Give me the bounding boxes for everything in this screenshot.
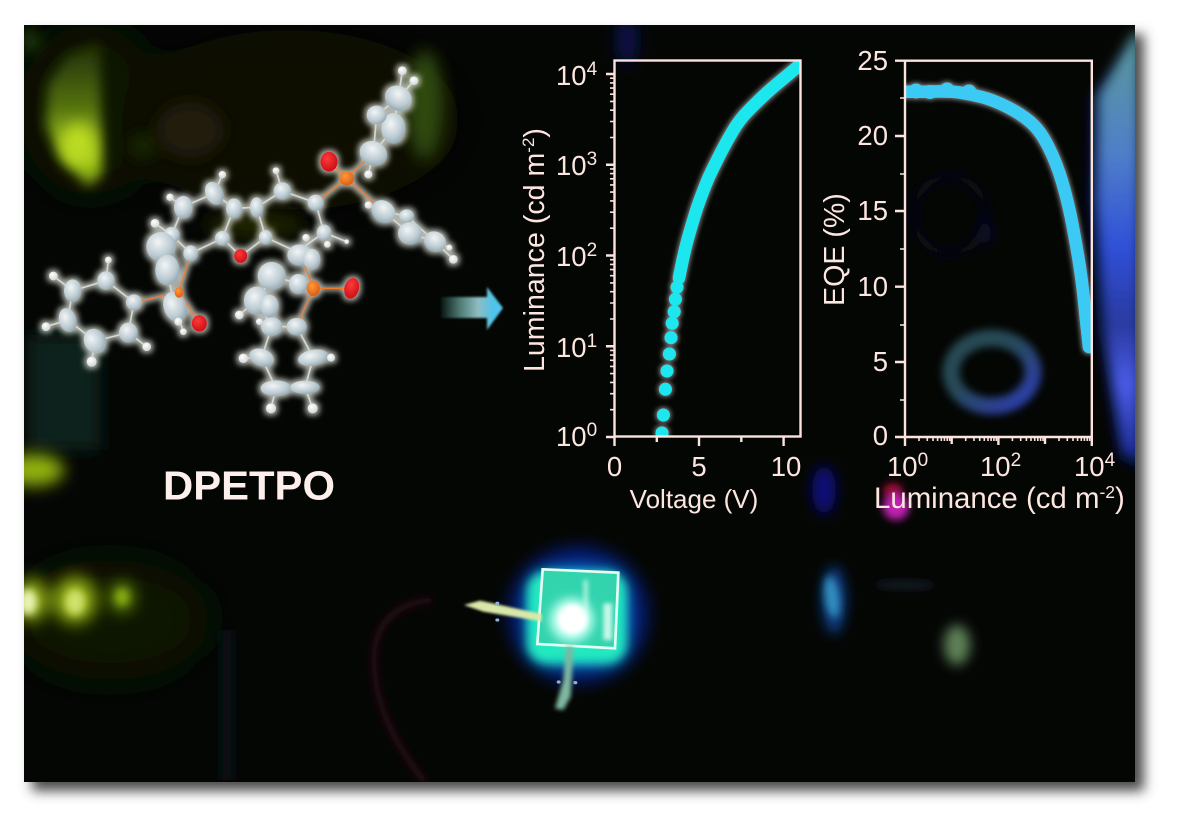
luminance x-axis tick labels: 2: [1011, 450, 1021, 471]
row of yellow lights: [16, 576, 134, 624]
luminance x-axis tick labels: [889, 452, 1115, 476]
molecule structure DPETPO: [42, 66, 458, 413]
luminance y-axis tick labels: 10: [556, 150, 587, 181]
dim teal block left: [28, 335, 100, 450]
voltage x-axis tick labels: 10: [771, 451, 801, 482]
luminance x-axis title: ): [1115, 482, 1125, 515]
phosphorus atoms: [175, 171, 354, 298]
EQE y-axis title: EQE (%): [819, 193, 851, 306]
luminance y-axis tick labels: 0: [587, 420, 597, 441]
luminance y-axis tick labels: 10: [556, 421, 587, 452]
luminance x-axis tick labels: 10: [1074, 451, 1105, 482]
luminance y-axis tick labels: 10: [556, 60, 587, 91]
hydrogen atoms: [42, 66, 458, 413]
luminance y-axis tick labels: 2: [587, 240, 597, 261]
luminance y-axis title: Luminance (cd m: [519, 153, 551, 372]
voltage x-axis tick labels: [608, 456, 800, 476]
pale green light: [944, 625, 970, 665]
EQE y-axis tick labels: 5: [873, 346, 888, 377]
luminance x-axis tick labels: 4: [1105, 450, 1116, 471]
blue lights lower right: [812, 466, 935, 634]
luminance y-axis tick labels: [556, 59, 598, 452]
luminance y-axis title: -2: [519, 138, 538, 153]
bonds: [46, 71, 453, 408]
EQE plot frame and ticks: [895, 61, 1092, 446]
arrow: [441, 287, 503, 330]
luminance y-axis tick labels: 10: [556, 332, 587, 363]
blue ring: [951, 338, 1033, 406]
brown and green patches: [22, 30, 443, 239]
yellow light left middle: [4, 454, 64, 486]
EQE curve: [903, 82, 1089, 347]
red wire: [374, 600, 432, 782]
luminance y-axis tick labels: 1: [587, 331, 597, 352]
dim green haze bottom left: [24, 561, 206, 679]
EQE y-axis tick labels: [857, 45, 888, 451]
luminance x-axis tick labels: 0: [918, 450, 928, 471]
dim olive haze behind molecule: [20, 25, 460, 210]
magenta light: [883, 483, 909, 520]
blue light right edge: [1088, 32, 1140, 470]
carbon atoms: [56, 80, 450, 396]
luminance x-axis title: Luminance (cd m: [874, 482, 1099, 515]
voltage x-axis tick labels: 5: [691, 451, 707, 482]
luminance plot frame and ticks: [606, 60, 800, 446]
EQE y-axis tick labels: 10: [857, 271, 888, 302]
glowing OLED device: [464, 532, 663, 710]
voltage x-axis title: Voltage (V): [630, 484, 758, 514]
oxygen atoms: [192, 152, 362, 332]
yellow-green light top left: [46, 42, 102, 187]
luminance y-axis tick labels: 10: [556, 241, 587, 272]
compound name label: DPETPO: [163, 462, 335, 508]
luminance y-axis tick labels: 3: [587, 149, 597, 170]
luminance x-axis tick labels: 10: [980, 451, 1011, 482]
luminance x-axis tick labels: 10: [887, 451, 918, 482]
luminance y-axis tick labels: 4: [587, 59, 598, 80]
faint ring top right: [914, 177, 991, 253]
blue glow top centre: [618, 16, 636, 64]
EQE y-axis tick labels: 15: [857, 195, 888, 226]
dim blue vertical bar: [222, 630, 232, 780]
voltage x-axis tick labels: 0: [607, 451, 622, 482]
EQE y-axis tick labels: 20: [857, 120, 888, 151]
chart: luminance versus voltage: [519, 59, 803, 514]
EQE y-axis tick labels: 0: [873, 420, 888, 451]
luminance y-axis title: ): [519, 128, 551, 138]
luminance x-axis title: -2: [1099, 482, 1115, 502]
data points: luminance curve: [656, 62, 803, 440]
EQE y-axis tick labels: 25: [857, 45, 888, 76]
chart: EQE versus luminance: [819, 45, 1125, 515]
